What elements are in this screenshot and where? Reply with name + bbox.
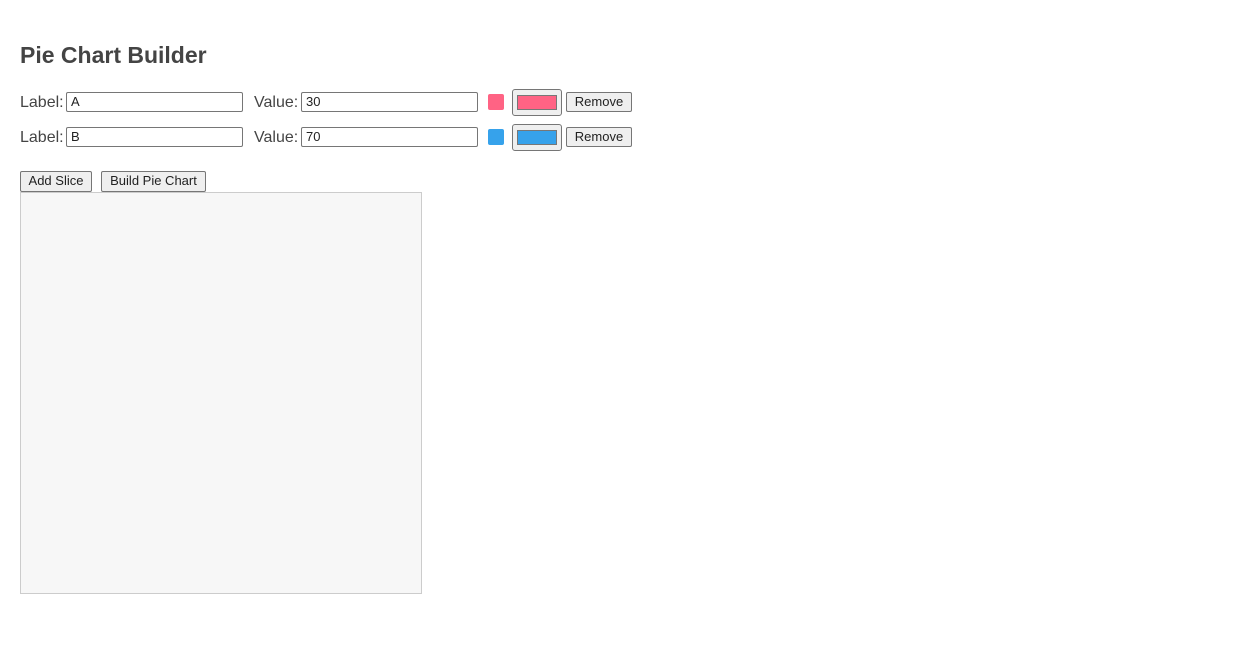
- value input B: 70: [306, 129, 320, 144]
- remove button B: Remove: [575, 129, 623, 144]
- build pie chart button: Build Pie Chart: [110, 173, 197, 188]
- color picker B: [512, 124, 562, 151]
- label text B: Label:: [20, 129, 64, 146]
- label input A: [66, 92, 243, 112]
- title: Pie Chart Builder: [20, 42, 207, 68]
- row: slice B: [20, 124, 632, 151]
- value text A: Value:: [254, 94, 298, 111]
- label text A: Label:: [20, 94, 64, 111]
- value text B: Value:: [254, 129, 298, 146]
- label input B: B: [71, 129, 80, 144]
- value input B: [301, 127, 478, 147]
- build pie chart button: [101, 171, 206, 192]
- value input A: 30: [306, 94, 320, 109]
- add slice button: [20, 171, 92, 192]
- swatch A: [488, 94, 504, 110]
- color picker A: [512, 89, 562, 116]
- remove button A: [566, 92, 632, 112]
- swatch B: [488, 129, 504, 145]
- row: slice A: [20, 89, 632, 116]
- remove button A: Remove: [575, 94, 623, 109]
- label input A: A: [71, 94, 80, 109]
- value input A: [301, 92, 478, 112]
- remove button B: [566, 127, 632, 147]
- chart canvas: [20, 192, 422, 594]
- label input B: [66, 127, 243, 147]
- add slice button: Add Slice: [29, 173, 83, 188]
